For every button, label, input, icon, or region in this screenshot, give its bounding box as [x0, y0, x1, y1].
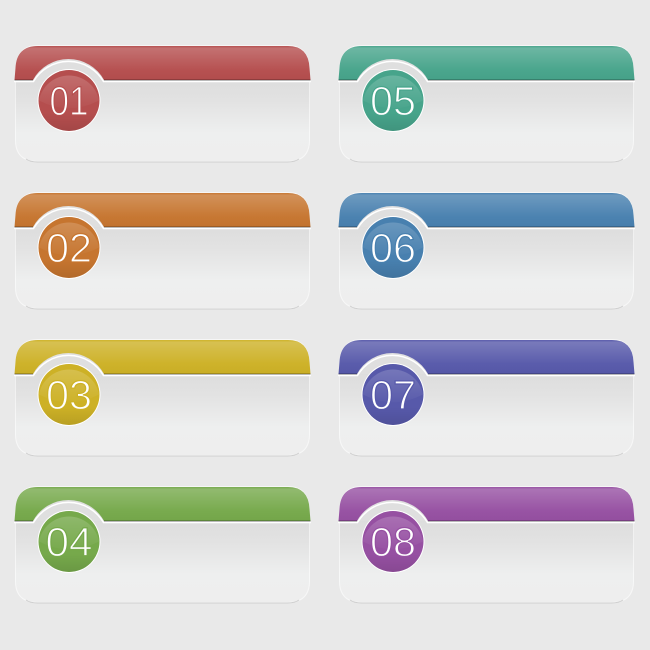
- card 03: yellow: [14, 340, 311, 456]
- number 07: 07: [370, 372, 416, 418]
- card 02: orange: [14, 192, 311, 309]
- number 08: 08: [370, 519, 416, 565]
- card 06: blue: [338, 192, 635, 309]
- card 05: teal: [338, 46, 635, 162]
- number 02: 02: [46, 225, 92, 271]
- card 07: indigo: [338, 340, 635, 456]
- number 01: 01: [50, 78, 88, 124]
- card 04: green: [14, 486, 311, 603]
- number 06: 06: [370, 225, 416, 271]
- number 04: 04: [46, 519, 92, 565]
- card 08: purple: [338, 486, 635, 603]
- card 01: red: [14, 46, 311, 162]
- number 05: 05: [370, 78, 416, 124]
- number 03: 03: [46, 372, 92, 418]
